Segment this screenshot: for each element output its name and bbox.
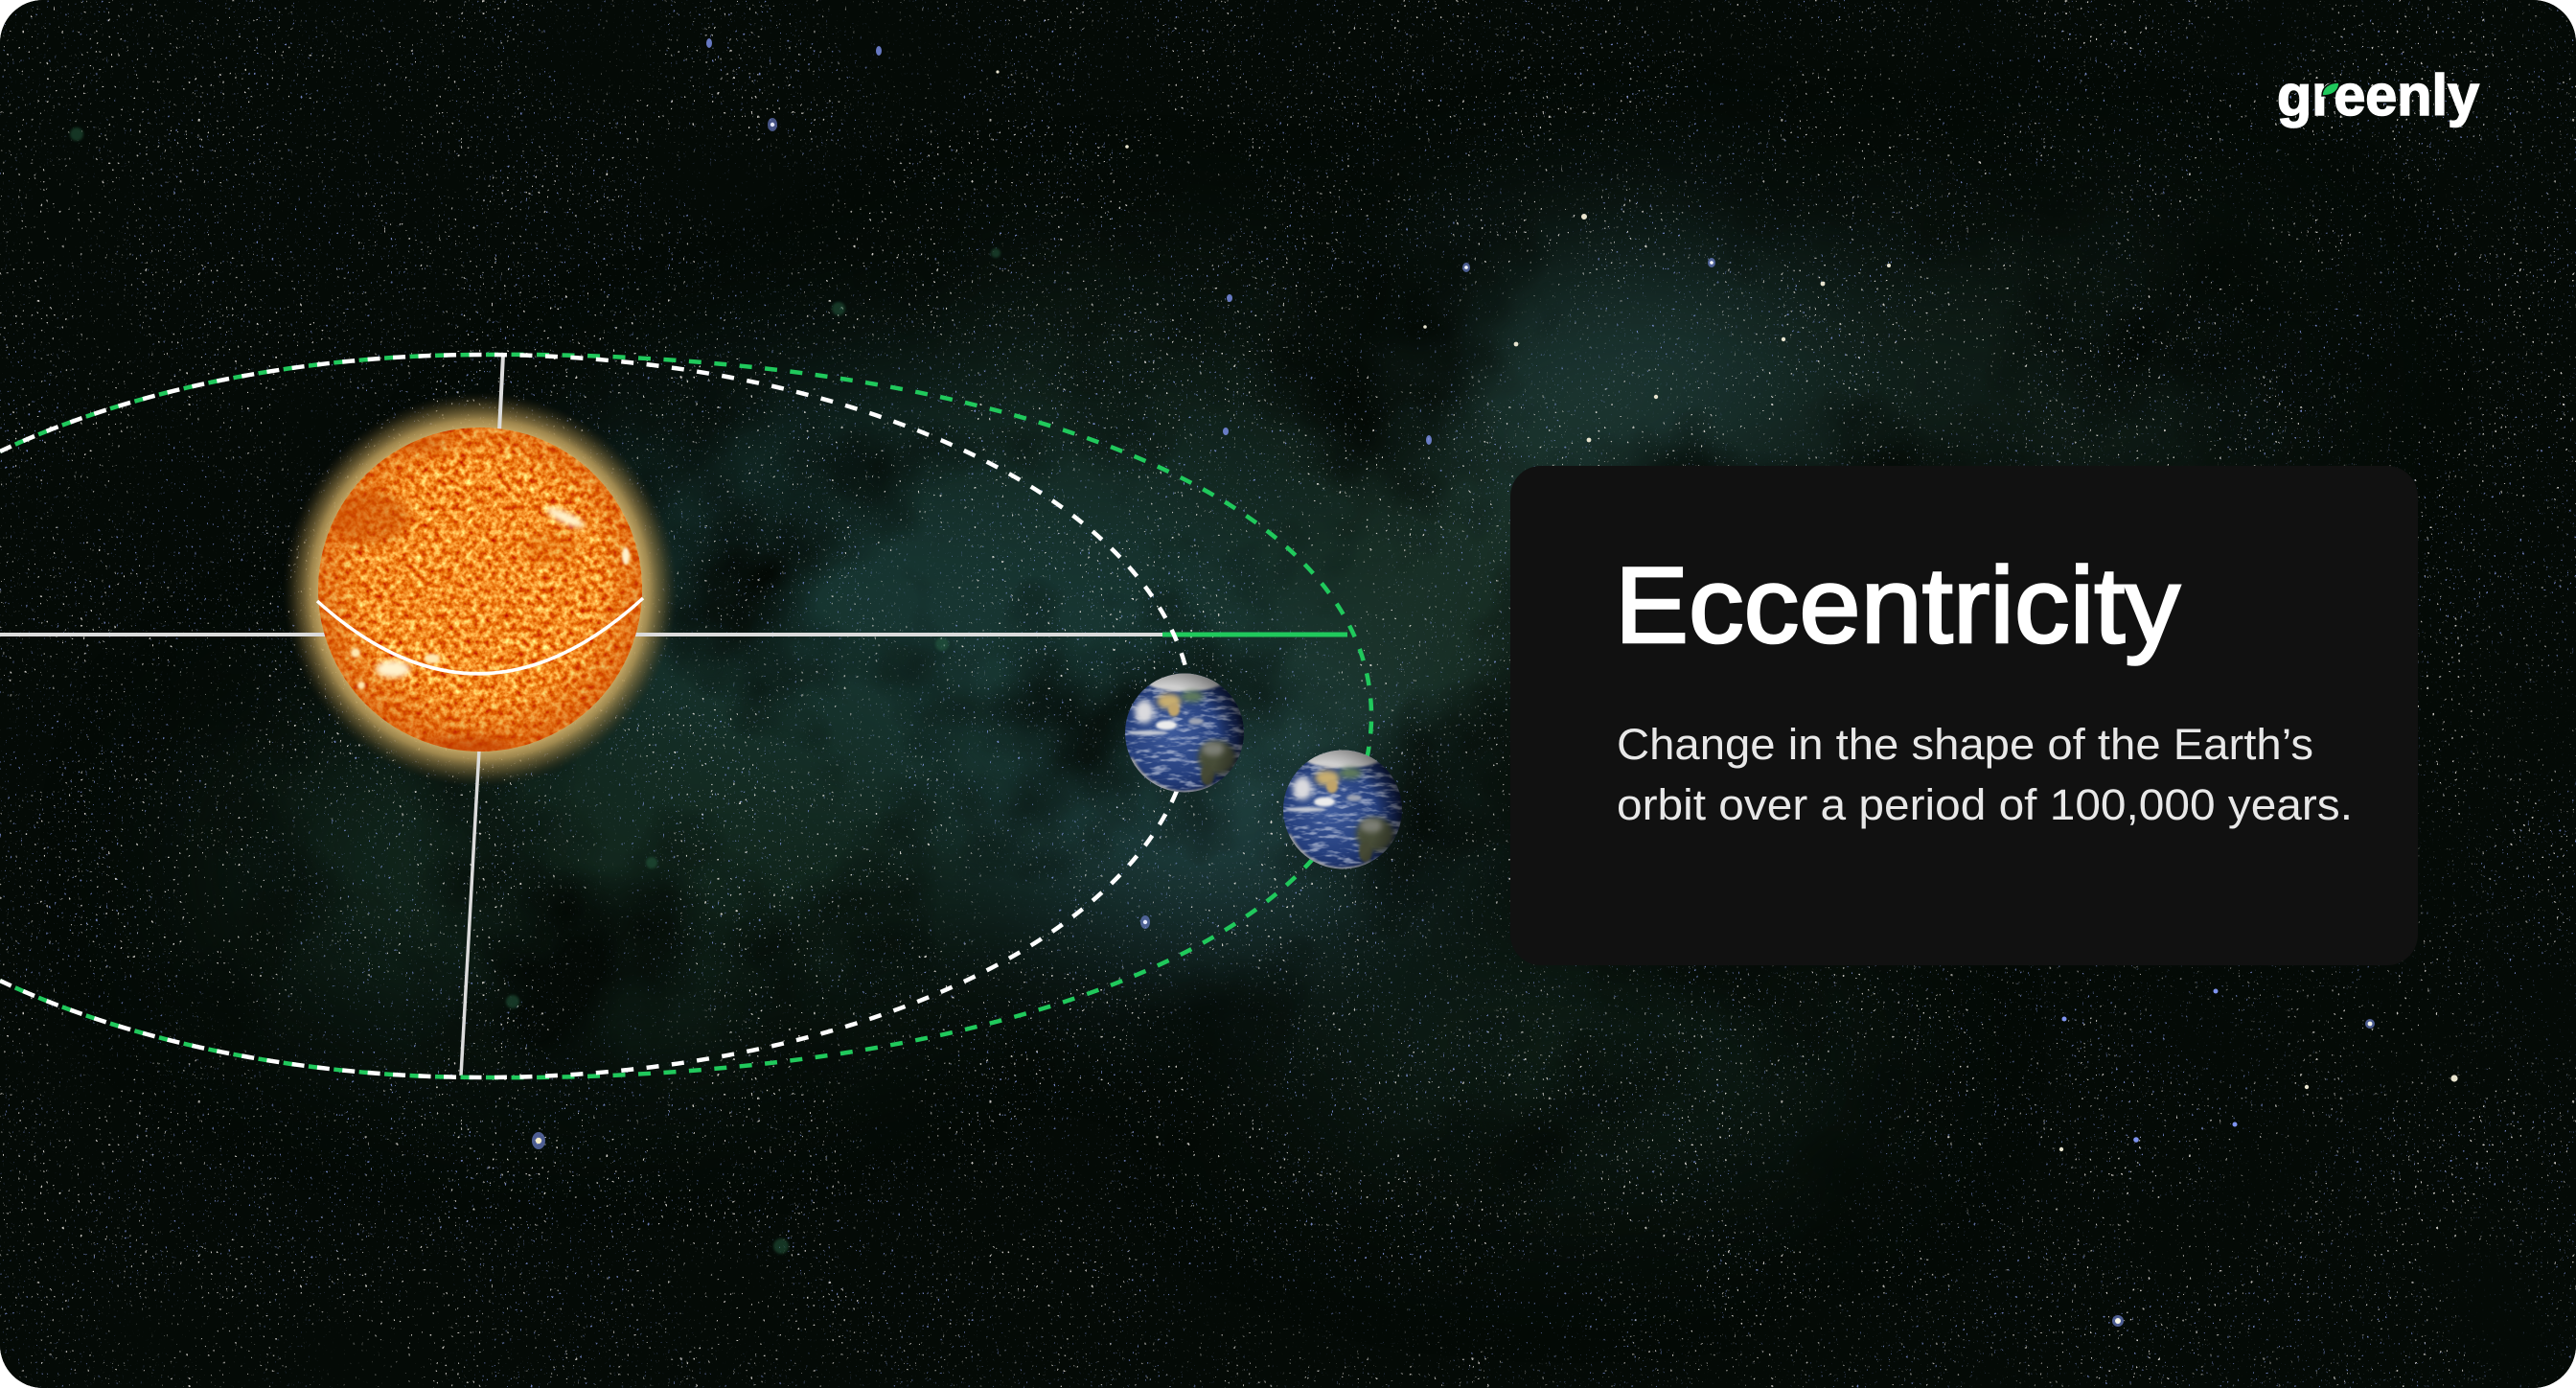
earth on white orbit <box>1125 671 1244 793</box>
sun <box>318 428 642 757</box>
heading: Eccentricity <box>1615 545 2180 665</box>
sun glow <box>283 392 678 787</box>
sun equator arc <box>317 598 643 674</box>
description <box>1617 720 2353 829</box>
description: Change in the shape of the Earth’s <box>1617 720 2313 769</box>
green dashed orbit <box>0 355 1371 1077</box>
description: orbit over a period of 100,000 years. <box>1617 780 2353 829</box>
panel: eccentricity card <box>1510 466 2418 965</box>
earth on green orbit <box>1283 748 1402 869</box>
icon: leaf <box>2322 82 2339 96</box>
axis lines <box>0 355 1163 1076</box>
logo: greenly: greenly <box>2277 63 2480 127</box>
eccentricity segment: green line <box>1162 633 1347 636</box>
white dashed orbit <box>0 355 1192 1077</box>
